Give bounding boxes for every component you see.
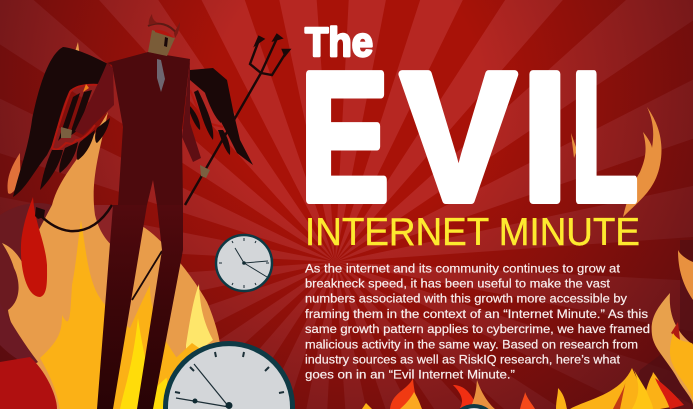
intro paragraph: malicious activity in the same way. Based on research from	[305, 337, 638, 351]
intro paragraph: As the internet and its community continues to grow at	[305, 262, 621, 276]
suit	[107, 52, 190, 205]
left flames	[0, 42, 220, 409]
devil character	[13, 14, 289, 409]
right flames	[362, 107, 693, 409]
title word: EVIL: V	[401, 34, 516, 239]
clock: bottom	[459, 404, 489, 409]
intro paragraph: goes on in an “Evil Internet Minute.”	[305, 367, 515, 381]
tail	[35, 205, 112, 231]
right wing	[189, 68, 253, 165]
head	[148, 30, 175, 56]
clock: small	[216, 235, 272, 291]
clock: large	[163, 341, 295, 409]
left wing	[13, 47, 110, 197]
title word: EVIL	[300, 34, 638, 239]
necktie	[157, 59, 165, 92]
pitchfork	[132, 35, 289, 300]
intro paragraph: same growth pattern applies to cybercrime, we have framed	[305, 322, 650, 336]
title word: The: The	[305, 19, 373, 65]
intro paragraph: breakneck speed, it has been useful to make the vast	[305, 276, 611, 290]
title	[300, 19, 638, 239]
intro paragraph: numbers associated with this growth more accessible by	[305, 292, 628, 306]
legs	[97, 205, 183, 409]
intro paragraph: industry sources as well as RiskIQ research, here’s what	[305, 352, 621, 366]
title word: EVIL: E	[300, 34, 389, 239]
subtitle: INTERNET MINUTE	[305, 211, 640, 254]
intro paragraph: framing them in the context of an “Internet Minute.” As this	[305, 307, 648, 321]
arms	[75, 63, 114, 135]
title word: EVIL: I	[522, 34, 568, 239]
horns	[148, 14, 180, 38]
intro paragraph	[305, 262, 650, 381]
title word: EVIL: L	[571, 34, 638, 239]
hands	[61, 127, 72, 138]
